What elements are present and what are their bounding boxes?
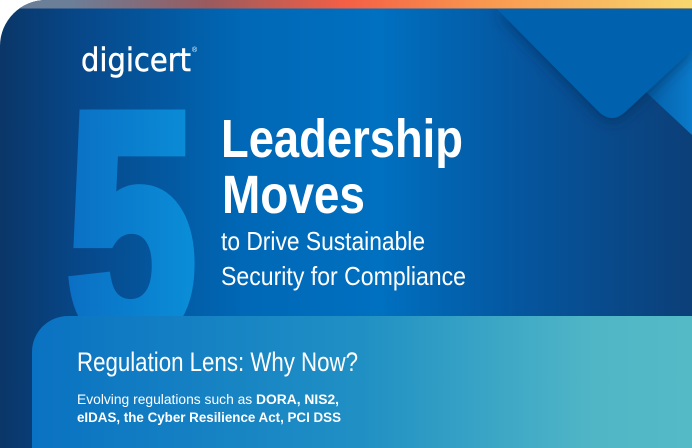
accent triangle xyxy=(646,48,692,135)
subtitle: Security for Compliance xyxy=(221,261,466,291)
title xyxy=(221,109,463,225)
big number 5: 5 xyxy=(67,48,196,407)
title: Leadership xyxy=(221,109,463,169)
title: Moves xyxy=(222,165,365,225)
panel: regulation lens xyxy=(32,316,692,448)
logo: digicert: ® xyxy=(192,46,198,54)
panel body text: eIDAS, the Cyber Resilience Act, PCI DSS xyxy=(77,410,341,425)
panel body text: Evolving regulations such as DORA, NIS2, xyxy=(77,392,339,407)
panel heading: Regulation Lens: Why Now? xyxy=(77,347,358,377)
panel body text xyxy=(77,392,341,425)
envelope flap xyxy=(497,9,692,118)
top gradient bar xyxy=(0,0,692,8)
logo: digicert: digicert xyxy=(81,41,191,79)
subtitle: to Drive Sustainable xyxy=(221,226,425,256)
subtitle xyxy=(221,226,466,291)
